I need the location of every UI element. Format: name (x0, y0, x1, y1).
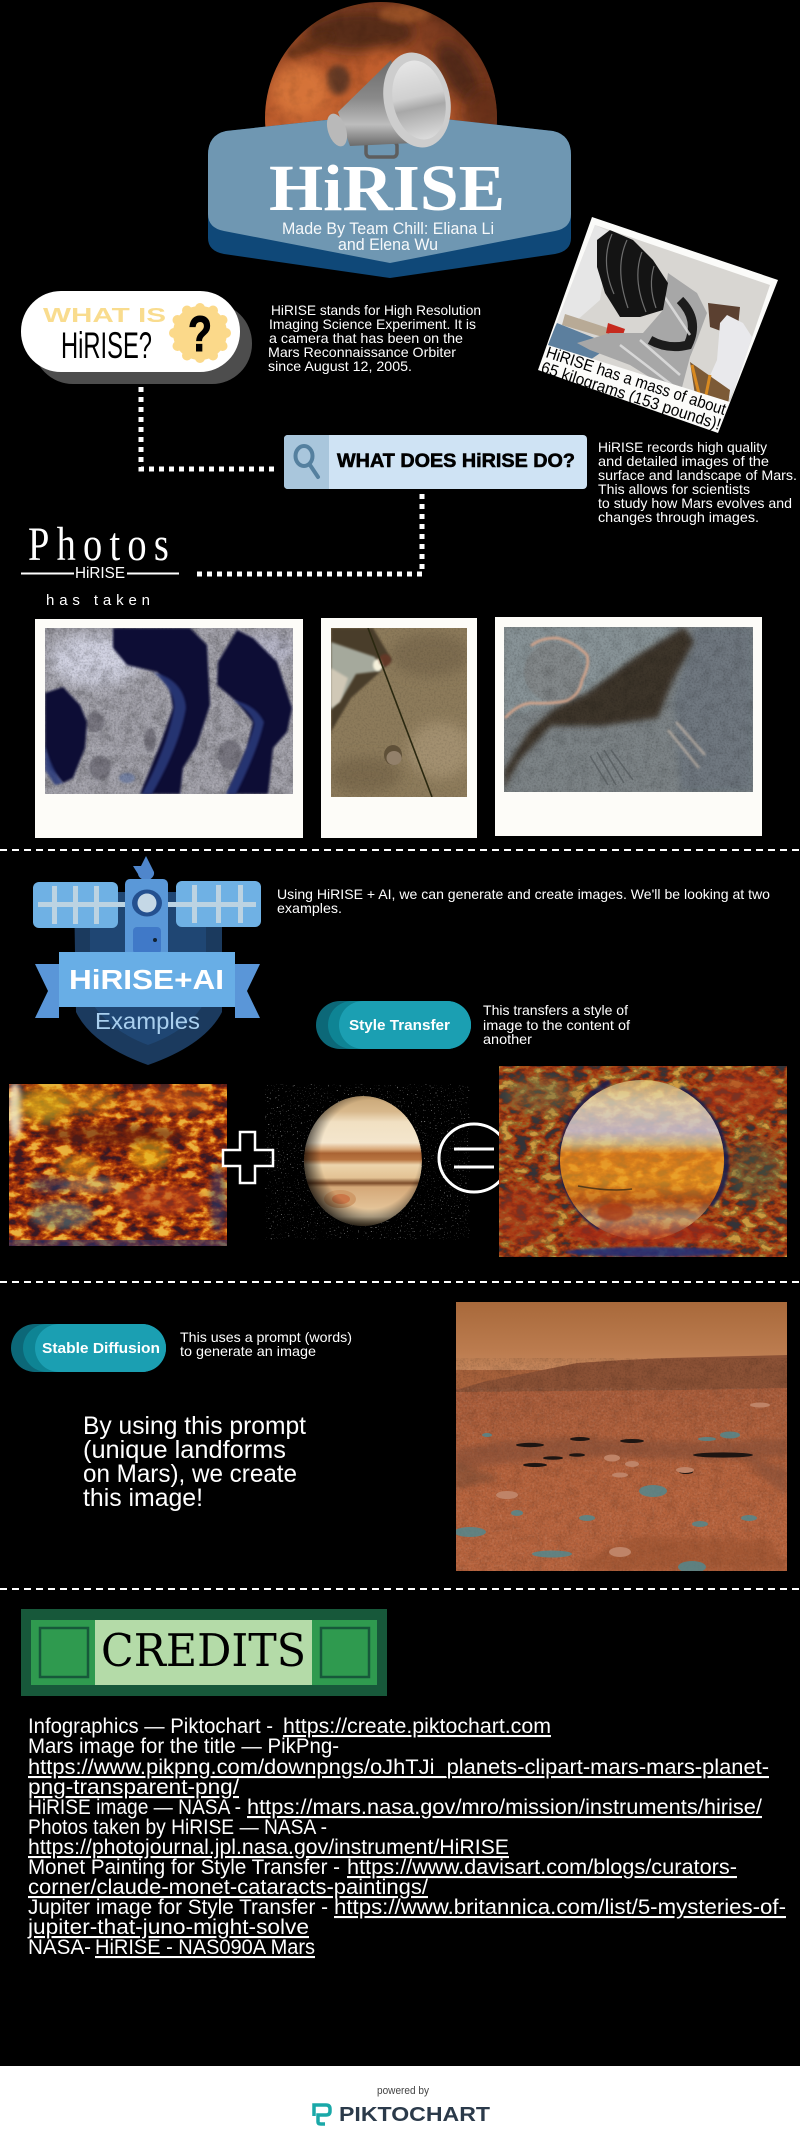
section divider (0, 1281, 800, 1283)
text block: prompt statement: this image! (83, 1484, 203, 1512)
image: generated Mars landscape (456, 1302, 787, 1571)
text block: what HiRISE does: surface and landscape of Mars. (598, 467, 797, 483)
subtitle (282, 219, 494, 254)
photo (504, 627, 753, 792)
text block: what is HiRISE: a camera that has been on the (269, 330, 463, 346)
text block: stable diffusion explanation: to generate an image (180, 1343, 316, 1359)
dotted connector: what does to photos (194, 494, 422, 574)
text block: what is HiRISE: Imaging Science Experiment. It is (269, 316, 476, 332)
heading: credits (21, 1609, 387, 1696)
icon: equals (439, 1124, 509, 1192)
ribbon (35, 952, 260, 1018)
pill: style transfer: Style Transfer (349, 1017, 450, 1034)
tilted polaroid: HiRISE camera (538, 217, 780, 434)
camera photo (548, 225, 770, 402)
credits list (27, 1715, 786, 1959)
credits list: NASA- (28, 1936, 91, 1959)
text block: what is HiRISE: Mars Reconnaissance Orbiter (268, 344, 456, 360)
heading pill: what is HiRISE: HiRISE? (61, 325, 152, 366)
footer: powered by Piktochart: powered by (377, 2085, 429, 2097)
icon: plus (223, 1132, 273, 1183)
credits list: https://www.davisart.com/blogs/curators- (347, 1856, 737, 1879)
text block: intro to AI examples: Using HiRISE + AI, we can generate and create images. We'll be looking at two (277, 886, 770, 902)
text block: style transfer explanation: image to the content of (483, 1017, 630, 1033)
credits list: jupiter-that-juno-might-solve (27, 1916, 309, 1939)
satellite solar panels (33, 881, 261, 928)
heading pill: what is HiRISE: WHAT IS (43, 304, 166, 327)
credits list: Mars image for the title — PikPng- (28, 1735, 339, 1758)
dotted connector: what is to what does (141, 387, 275, 469)
credits list: Jupiter image for Style Transfer - (28, 1896, 328, 1919)
text block: prompt statement (83, 1412, 306, 1512)
text block: what is HiRISE (268, 302, 481, 374)
photo (331, 628, 467, 797)
text block: what HiRISE does: changes through images. (598, 509, 759, 525)
image: style transfer result (499, 1066, 787, 1257)
text block: stable diffusion explanation (180, 1329, 352, 1359)
credits list: corner/claude-monet-cataracts-paintings/ (28, 1876, 428, 1899)
text block: what HiRISE does: to study how Mars evolves and (598, 495, 792, 511)
photo (45, 628, 293, 794)
text block: prompt statement: on Mars), we create (83, 1460, 297, 1488)
banner main plate (208, 113, 571, 263)
text block: what HiRISE does: and detailed images of the (598, 453, 769, 469)
icon: Piktochart logo (314, 2105, 330, 2124)
icon: megaphone (323, 46, 459, 157)
credits list: https://create.piktochart.com (283, 1715, 551, 1738)
text block: intro to AI examples (277, 886, 770, 916)
heading box: what does HiRISE do (284, 435, 587, 489)
heading: photos HiRISE has taken: HiRISE (75, 565, 125, 582)
text block: style transfer explanation (483, 1002, 630, 1047)
credits list: Photos taken by HiRISE — NASA - (28, 1816, 327, 1839)
banner dark lower edge (208, 113, 571, 278)
polaroid 2: tan plains (321, 618, 477, 838)
credits list: HiRISE image — NASA - (28, 1796, 241, 1819)
ribbon: HiRISE+AI (69, 964, 224, 995)
pill: style transfer (316, 1001, 471, 1049)
title banner (208, 46, 571, 278)
photo caption: 65 kilograms (153 pounds)! (539, 359, 723, 434)
text block: what HiRISE does: This allows for scientists (598, 481, 750, 497)
section divider (0, 849, 800, 851)
shield (74, 892, 222, 1065)
satellite body (125, 879, 168, 957)
heading: photos HiRISE has taken: Photos (28, 518, 169, 571)
text block: what HiRISE does (598, 439, 797, 525)
credits list: https://mars.nasa.gov/mro/mission/instruments/hirise/ (247, 1796, 762, 1819)
text block: what is HiRISE: since August 12, 2005. (268, 358, 412, 374)
credits list: HiRISE - NAS090A Mars (95, 1936, 315, 1959)
badge: HiRISE + AI satellite (33, 856, 261, 1065)
icon: magnifier (296, 446, 318, 477)
subtitle: and Elena Wu (338, 235, 438, 254)
photo caption: HiRISE has a mass of about (544, 344, 728, 419)
credits list: Infographics — Piktochart - (28, 1715, 273, 1738)
heading: credits: CREDITS (101, 1624, 306, 1677)
credits list: png-transparent-png/ (28, 1776, 239, 1799)
credits list: Monet Painting for Style Transfer - (28, 1856, 340, 1879)
text block: style transfer explanation: This transfers a style of (483, 1002, 628, 1018)
polaroid 1: dark dunes (35, 619, 303, 838)
footer: powered by Piktochart: PIKTOCHART (339, 2104, 490, 2126)
text block: stable diffusion explanation: This uses a prompt (words) (180, 1329, 352, 1345)
icon: question badge (169, 303, 231, 363)
title text: HiRISE (269, 152, 505, 225)
footer: powered by Piktochart (0, 2066, 800, 2146)
text block: style transfer explanation: another (483, 1031, 532, 1047)
credits list: https://www.britannica.com/list/5-mysteries-of- (334, 1896, 786, 1919)
polaroid 3: crater slopes (495, 617, 762, 836)
planet Mars image (265, 2, 497, 126)
image: Monet painting (9, 1084, 227, 1246)
subtitle: Made By Team Chill: Eliana Li (282, 219, 494, 238)
credits list: https://www.pikpng.com/downpngs/oJhTJi_planets-clipart-mars-mars-planet- (28, 1756, 769, 1779)
text block: prompt statement: (unique landforms (83, 1436, 286, 1464)
text block: prompt statement: By using this prompt (83, 1412, 306, 1440)
text block: what is HiRISE: HiRISE stands for High Resolution (271, 302, 481, 318)
credits list: https://photojournal.jpl.nasa.gov/instrument/HiRISE (28, 1836, 509, 1859)
section divider (0, 1588, 800, 1590)
satellite antenna (133, 856, 154, 880)
heading pill: what is HiRISE (21, 291, 252, 384)
heading: photos HiRISE has taken: has taken (46, 592, 150, 609)
heading: photos HiRISE has taken (21, 518, 179, 609)
pill: stable diffusion: Stable Diffusion (42, 1340, 160, 1357)
icon: question badge: ? (188, 306, 212, 362)
heading box: what does HiRISE do: WHAT DOES HiRISE DO? (337, 451, 575, 472)
pill: stable diffusion (11, 1324, 166, 1372)
text block: what HiRISE does: HiRISE records high quality (598, 439, 767, 455)
shield label: Examples (95, 1008, 200, 1034)
text block: intro to AI examples: examples. (277, 900, 342, 916)
image: Jupiter (265, 1084, 470, 1240)
